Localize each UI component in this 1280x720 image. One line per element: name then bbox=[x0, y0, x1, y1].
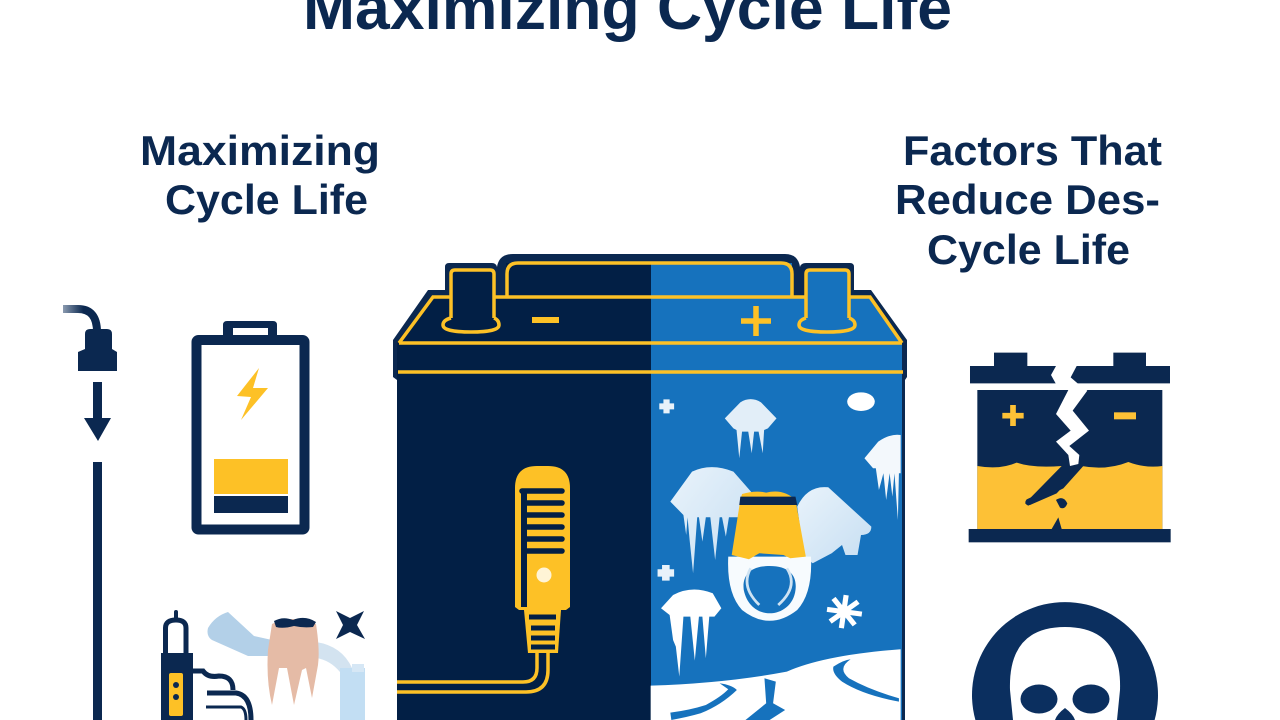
heading: factors that reduce cycle life: Reduce Des- bbox=[895, 176, 1160, 223]
heading: factors that reduce cycle life: Factors That bbox=[903, 127, 1162, 174]
minus sign bbox=[1114, 412, 1136, 419]
asterisk snowflake bbox=[825, 593, 864, 631]
base bar bbox=[969, 529, 1171, 542]
central battery bbox=[393, 254, 907, 720]
plus sign bbox=[1002, 405, 1024, 426]
heading: maximizing cycle life: Maximizing bbox=[140, 127, 380, 174]
icon: low charge battery bbox=[196, 321, 304, 530]
x mark bbox=[336, 611, 365, 639]
plug connector bbox=[397, 466, 570, 692]
heading: maximizing cycle life bbox=[140, 127, 380, 223]
heading: maximizing cycle life: Cycle Life bbox=[165, 176, 368, 223]
yellow clamp bbox=[732, 491, 806, 559]
bottom left icicle dome bbox=[661, 590, 721, 677]
battery charge level bbox=[214, 459, 288, 513]
left half of battery bbox=[397, 263, 651, 720]
white lightning crack bbox=[1051, 366, 1089, 466]
electrolyte bbox=[977, 462, 1162, 529]
battery body bbox=[977, 390, 1162, 529]
battery casing outline bbox=[393, 254, 907, 720]
large right ice dome bbox=[797, 487, 871, 563]
pale pipe bbox=[208, 612, 365, 720]
top icicle dome bbox=[725, 399, 777, 458]
lightning bolt bbox=[237, 368, 268, 420]
snow ground with cracks bbox=[651, 649, 901, 720]
white ring bbox=[728, 557, 811, 621]
small plus snowflakes bbox=[658, 392, 875, 581]
icon: plug with downward arrow and line bbox=[63, 309, 117, 720]
ring inner highlight bbox=[747, 568, 791, 605]
charger bbox=[161, 610, 251, 720]
icon: skull warning bbox=[972, 602, 1158, 720]
battery top with terminals bbox=[970, 353, 1170, 383]
melted skin-tone element bbox=[268, 618, 319, 705]
skull bbox=[1010, 627, 1120, 720]
minus sign bbox=[532, 317, 559, 323]
plus sign bbox=[741, 306, 771, 336]
right edge icicle dome bbox=[864, 435, 901, 520]
frozen side: ice and snow bbox=[651, 392, 901, 720]
heading: factors that reduce cycle life bbox=[895, 127, 1162, 273]
heading: factors that reduce cycle life: Cycle Life bbox=[927, 226, 1130, 273]
large left icicle dome bbox=[670, 467, 752, 573]
crack detail bbox=[1025, 466, 1083, 506]
icon: charger and damaged pipe bbox=[161, 610, 365, 720]
yellow lid lines bbox=[398, 263, 903, 372]
icon: cracked battery bbox=[969, 353, 1171, 542]
right half of battery bbox=[651, 263, 902, 720]
